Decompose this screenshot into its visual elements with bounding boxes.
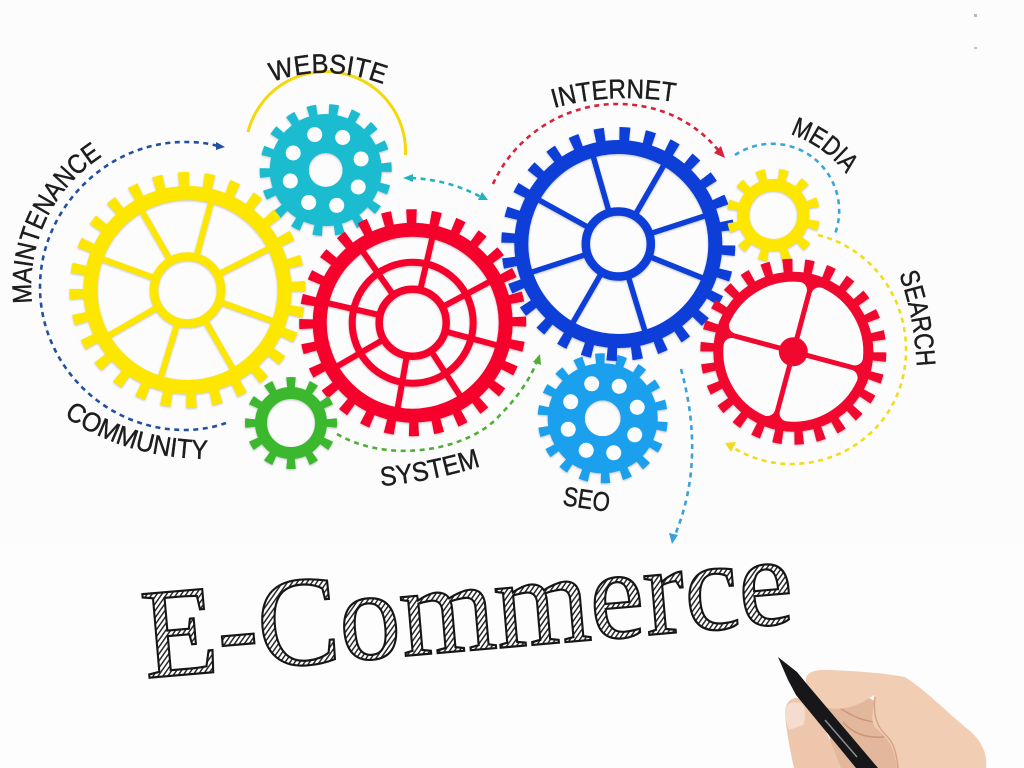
arc: website solid yellow [248,72,406,155]
gear: large yellow [70,173,305,407]
icon: hand holding pen [778,657,986,768]
title: E-Commerce hatched lettering: E-Commerce [136,509,798,706]
arrow: maintenance and community navy arc [40,142,226,430]
label: search: SEARCH [900,270,936,366]
label: maintenance: MAINTENANCE [12,142,102,302]
gear: red four spoke search [699,257,888,446]
arrow: internet red arc [493,104,725,184]
arrow: light blue long curve [669,369,692,544]
gear: small yellow media [728,170,818,260]
label: seo: SEO [563,487,610,512]
arrow: media light blue arc [735,144,839,234]
arrow: system green curve [337,354,541,451]
arrow: search yellow arc [725,235,906,464]
label: community: COMMUNITY [68,404,208,460]
gear: large red [302,212,523,433]
label: internet: INTERNET [551,79,677,108]
gear: sky blue seo [540,355,666,481]
gear: small green [248,380,334,466]
arrow: teal double arrow [403,174,488,200]
gear: large blue [508,133,729,355]
label: media: MEDIA [792,117,856,174]
label: website: WEBSITE [266,54,388,84]
label: system: SYSTEM [381,448,480,486]
gear: teal website [264,109,387,231]
